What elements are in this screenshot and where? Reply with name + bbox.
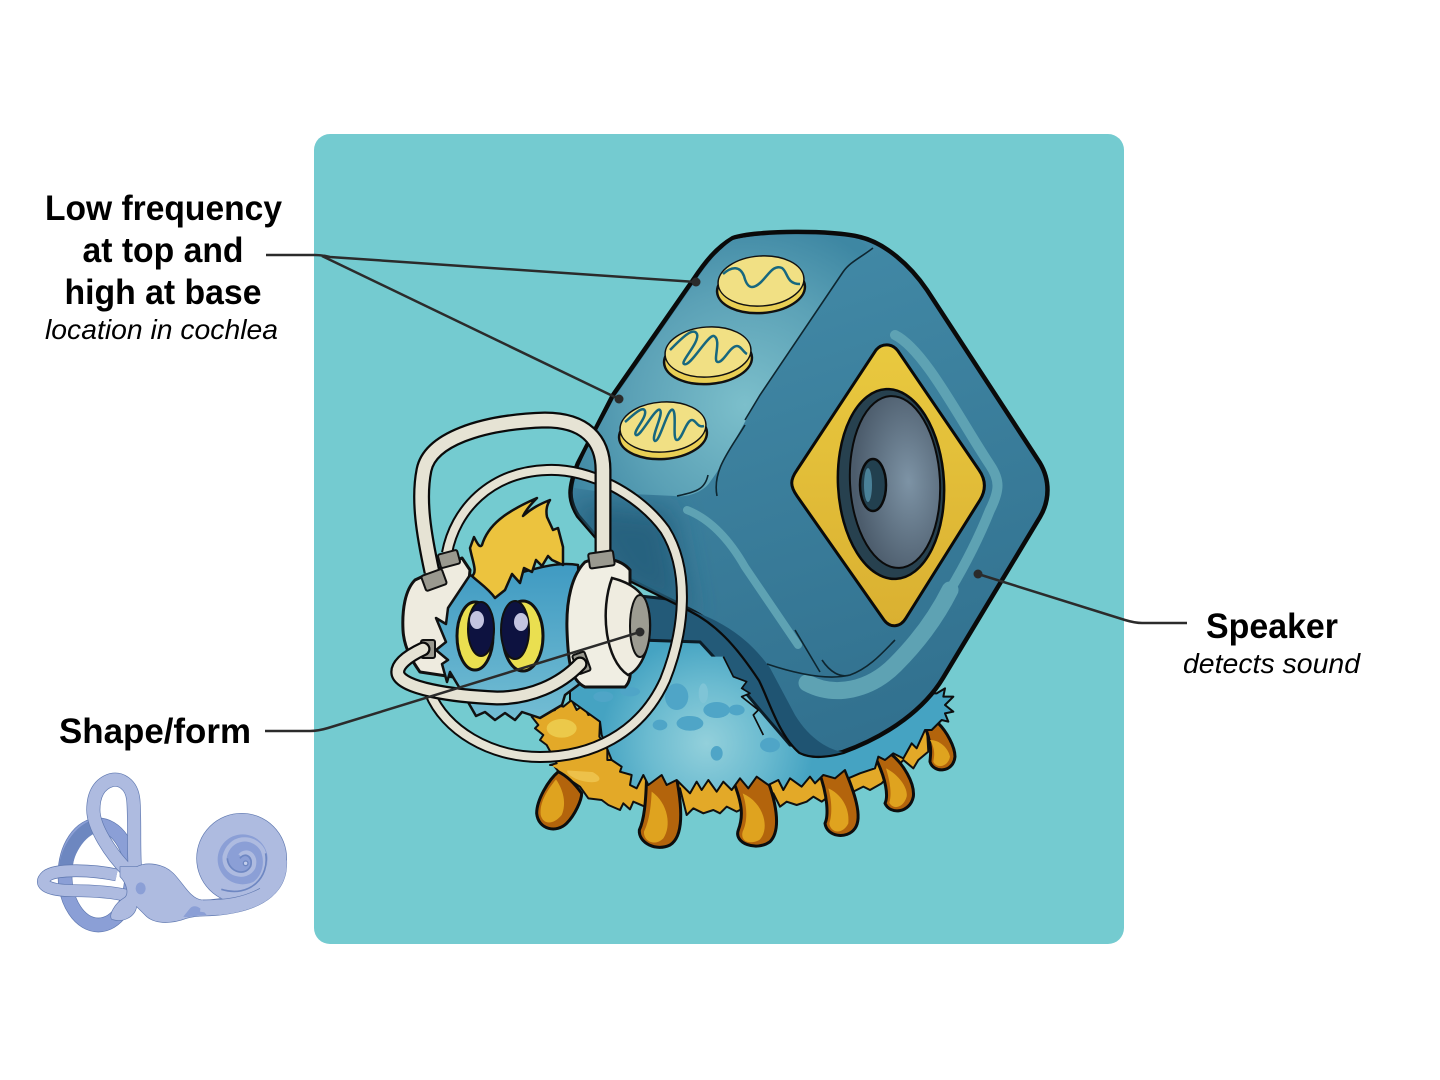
headset: large ring	[430, 470, 682, 757]
disk: mid frequency wave	[662, 324, 754, 387]
headset clips	[421, 550, 615, 674]
right eye	[501, 601, 543, 671]
shell lower shadow	[690, 610, 843, 756]
shell face crease lines	[677, 248, 873, 496]
shell outer body	[570, 232, 1048, 756]
headset: microphone arm	[398, 649, 580, 698]
text block: speaker: detects sound	[1183, 648, 1361, 679]
text block: speaker: Speaker	[1206, 607, 1338, 646]
panel: illustration background	[314, 134, 1124, 944]
shell underside shade	[570, 500, 690, 620]
yellow chest fur	[532, 700, 613, 773]
text block: low frequency: location in cochlea	[45, 314, 278, 345]
text block: shape/form: Shape/form	[59, 712, 251, 751]
shell highlight bands	[687, 335, 998, 691]
callout: speaker	[974, 570, 1187, 623]
speaker cone	[833, 386, 949, 582]
callout: shape to ear cup	[265, 628, 644, 731]
illustration: snail creature with speaker shell	[398, 232, 1048, 847]
headset: left ear cup	[403, 558, 470, 678]
text block: low frequency: Low frequency	[45, 189, 283, 228]
body fur overlapping shell strap	[677, 657, 763, 740]
legs	[537, 723, 955, 847]
text block: low frequency: at top and	[82, 231, 244, 270]
left eye	[457, 602, 494, 670]
text block: low frequency: high at base	[64, 273, 262, 312]
creature head	[436, 498, 585, 720]
yellow fringe	[553, 723, 928, 815]
lower crease	[767, 630, 895, 677]
headset: upper headband	[422, 420, 603, 572]
speaker shell	[570, 232, 1048, 756]
body fur patches	[593, 683, 780, 761]
shell top face	[574, 235, 868, 496]
blue furry body	[570, 640, 953, 793]
callout: frequency to disks	[266, 255, 700, 404]
yellow diamond plate	[792, 345, 984, 626]
headset: right ear cup	[567, 559, 650, 687]
text block: low frequency	[45, 189, 283, 345]
disk: high frequency wave	[617, 399, 709, 462]
text block: speaker	[1183, 607, 1361, 679]
icon: inner ear cochlea	[43, 780, 287, 925]
disk: low frequency wave	[715, 253, 807, 316]
dark strap under shell	[640, 596, 825, 750]
creature lower body with legs and fur	[532, 640, 955, 847]
yellow hair tuft	[470, 498, 563, 598]
